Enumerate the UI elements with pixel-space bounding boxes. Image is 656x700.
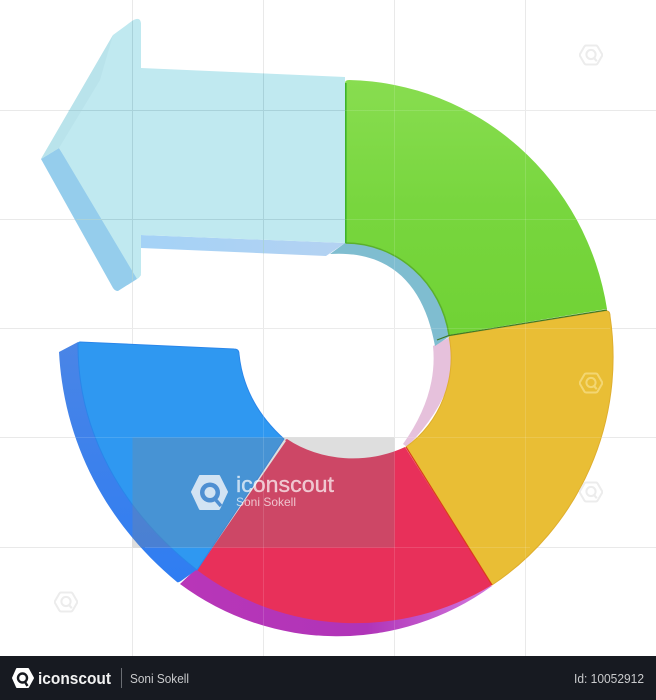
small watermark icon: lower left — [55, 592, 77, 612]
green and yellow seam — [437, 310, 607, 340]
blue outer side — [59, 342, 199, 582]
segment: blue — [59, 342, 284, 582]
green soft inner edge — [346, 243, 449, 335]
watermark tint panel — [132, 438, 394, 548]
green front face — [345, 80, 607, 335]
watermark hexagon icon — [192, 476, 227, 509]
red and yellow seam — [406, 447, 492, 585]
small watermark icon: top right — [580, 46, 602, 64]
arrow front face — [41, 19, 345, 279]
footer logo icon — [13, 669, 33, 687]
grid seen through arrow — [68, 20, 345, 281]
green inner wall — [330, 243, 450, 346]
red front face — [197, 439, 492, 623]
footer divider — [121, 668, 122, 688]
segment: green — [330, 80, 607, 346]
watermark: iconscout logo and author — [192, 472, 334, 509]
blue front face — [78, 342, 284, 570]
small watermark icon: lower right — [580, 482, 602, 502]
arrow head top bevel — [41, 35, 113, 159]
small watermark icon: on yellow — [580, 374, 602, 392]
arrow: translucent light-blue head and shaft — [41, 18, 345, 291]
segment: yellow — [403, 311, 613, 585]
faint grid over colour — [60, 80, 610, 640]
arrow head side face — [41, 148, 141, 291]
watermark brand: iconscout — [236, 472, 334, 497]
footer author: Soni Sokell — [130, 671, 189, 686]
footer bar — [0, 656, 656, 700]
yellow inner wall — [403, 337, 453, 447]
green left edge — [345, 83, 347, 243]
arrow shaft underside — [141, 235, 345, 256]
watermark author: Soni Sokell — [236, 495, 296, 509]
yellow front face — [406, 311, 613, 585]
red outer side — [180, 566, 492, 636]
footer id: Id: 10052912 — [574, 671, 644, 686]
segment: red — [180, 439, 492, 636]
footer brand: iconscout — [38, 669, 111, 688]
